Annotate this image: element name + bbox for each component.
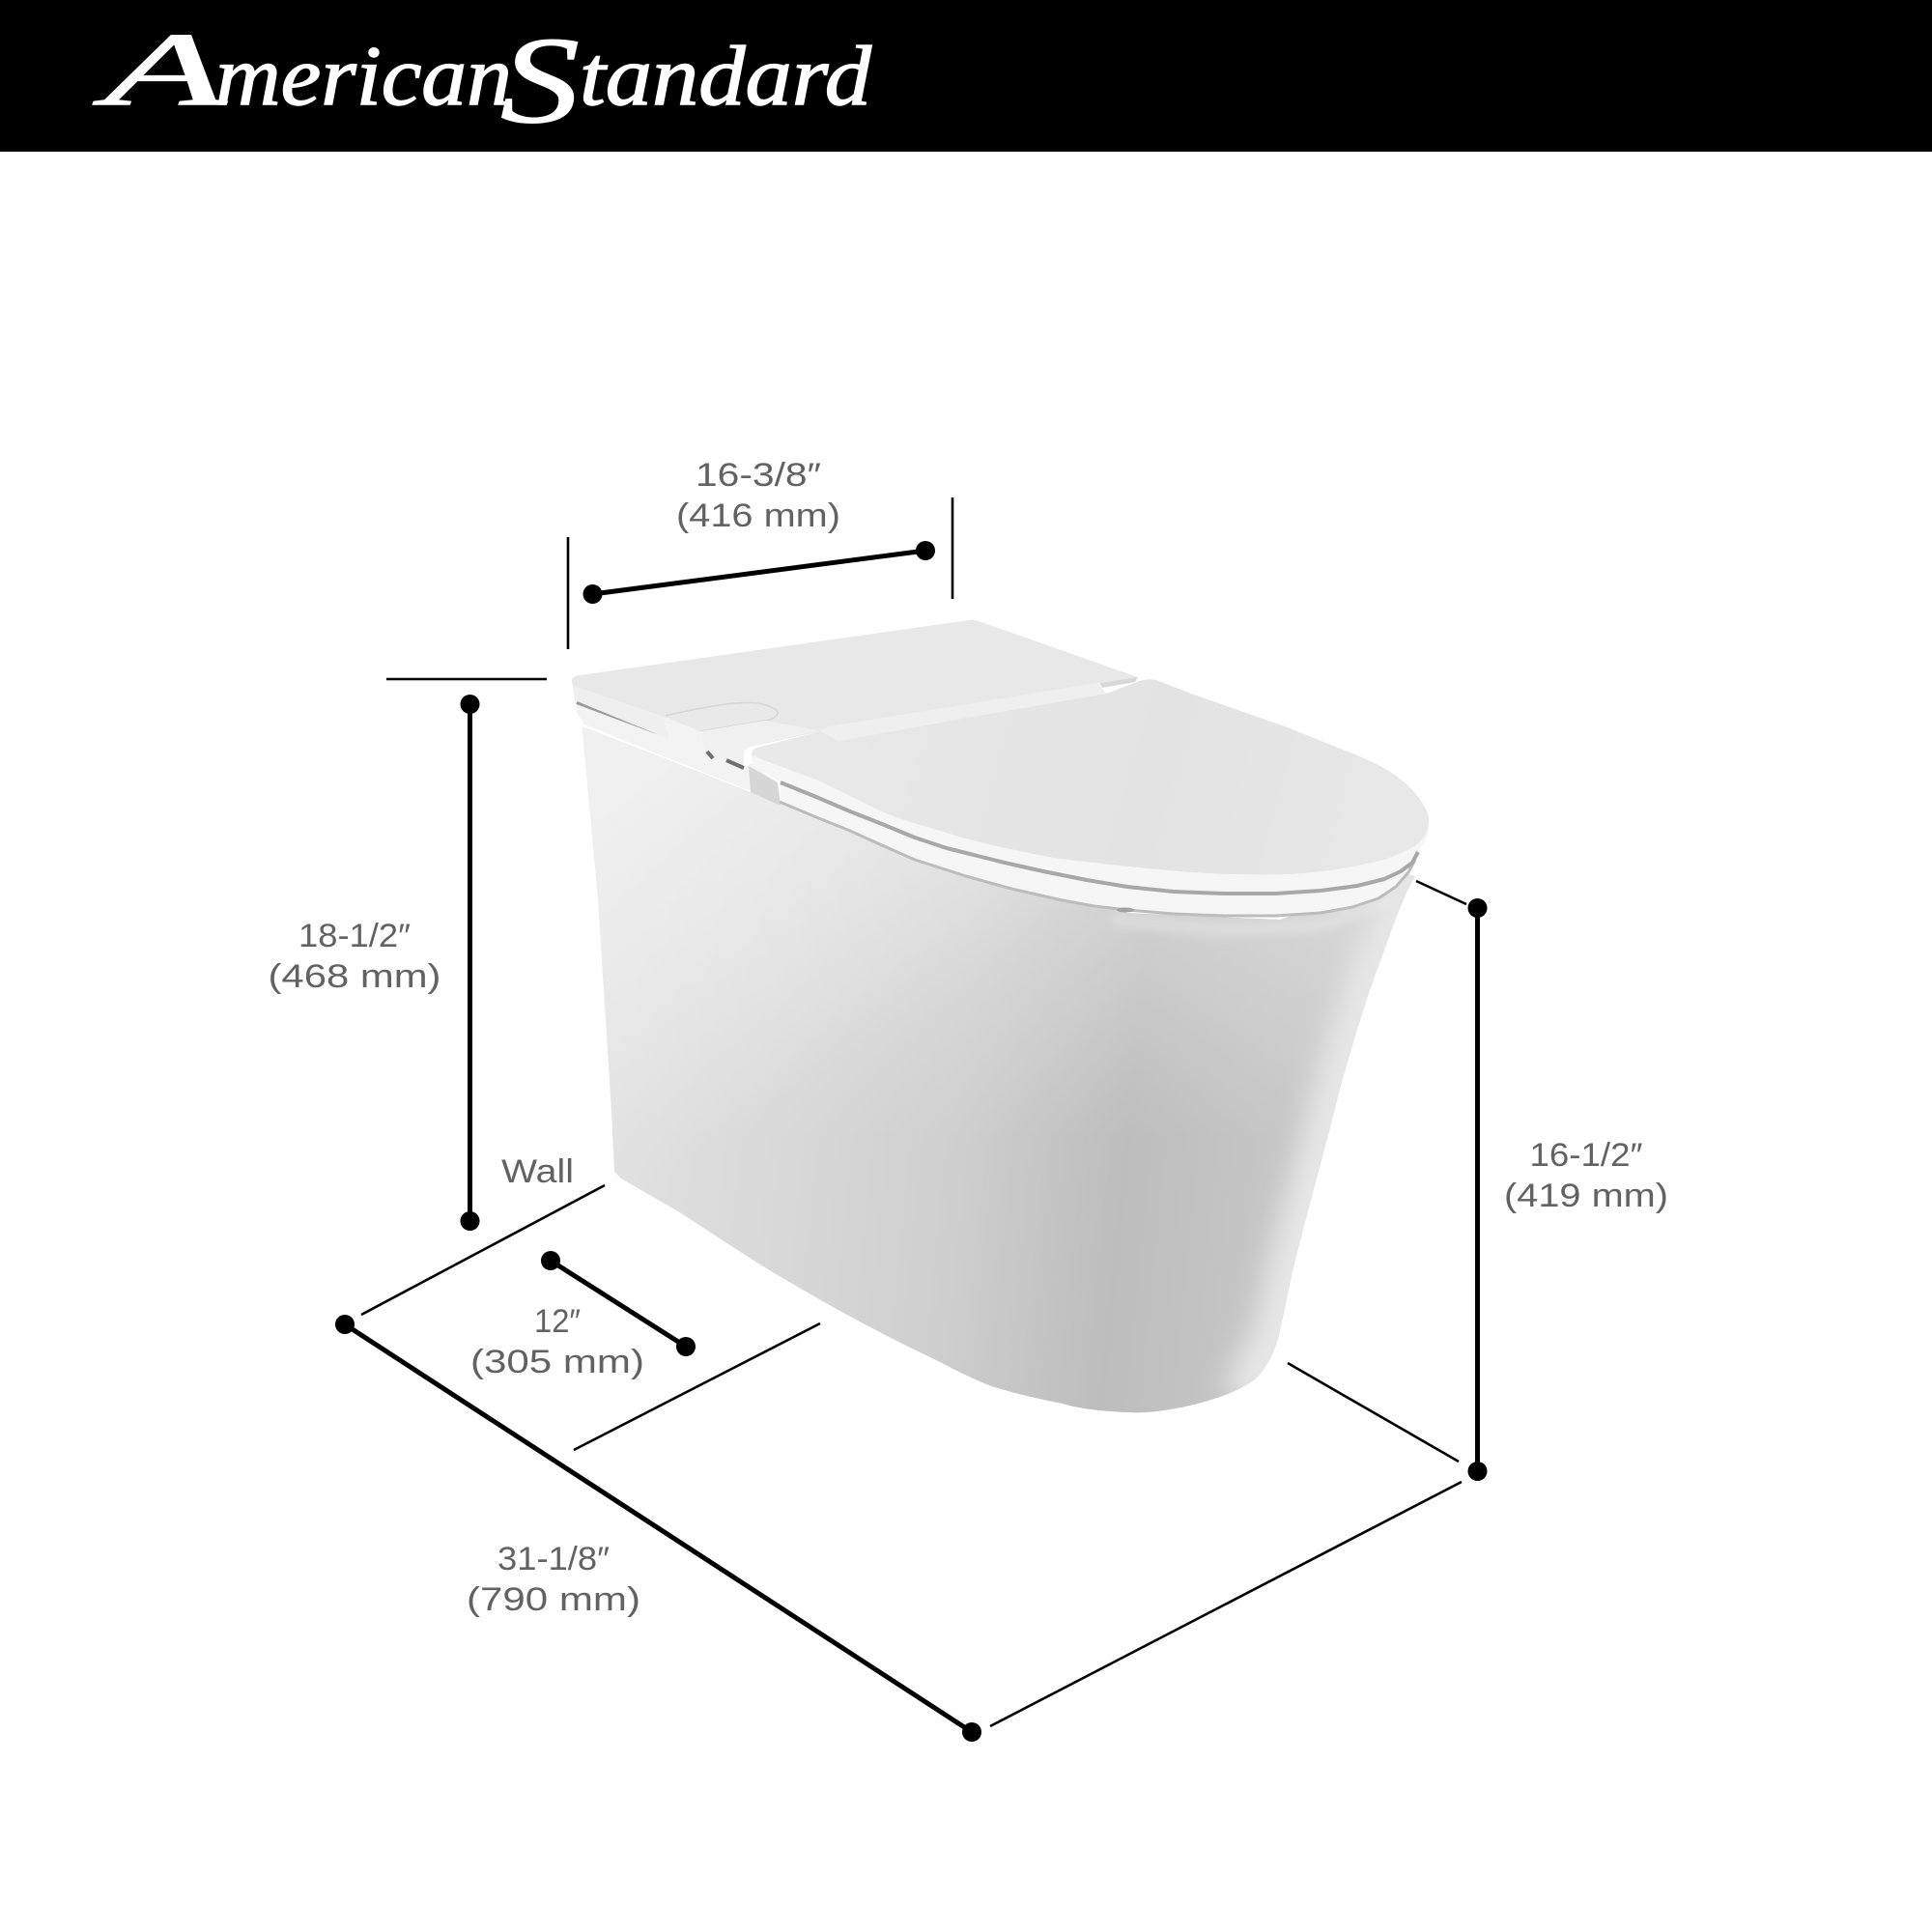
label xyxy=(467,1541,640,1618)
label: (790 mm) xyxy=(467,1581,640,1618)
dimension arrow xyxy=(335,1315,981,1742)
header band xyxy=(0,0,1932,152)
dimension: height to top 18-1/2 in xyxy=(269,679,547,1231)
hinge block xyxy=(700,721,819,768)
extension line left xyxy=(567,537,569,649)
seat rim lower grey line xyxy=(780,802,1415,916)
label: (419 mm) xyxy=(1504,1178,1668,1214)
dimension: overall length 31-1/8 in xyxy=(335,1315,981,1742)
label: 31-1/8″ xyxy=(497,1541,610,1577)
tank cover front edge xyxy=(572,681,669,739)
front extension line xyxy=(990,1482,1462,1726)
tank lower layer and hinge base xyxy=(577,702,776,791)
seat rim xyxy=(780,782,1418,916)
toilet illustration xyxy=(570,620,1430,1430)
logo: American Standard xyxy=(94,12,872,149)
label xyxy=(676,457,840,534)
dimension: seat width 16-3/8 in xyxy=(568,457,952,649)
label: 16-1/2″ xyxy=(1530,1137,1642,1174)
label: 12″ xyxy=(534,1303,581,1340)
toilet body xyxy=(570,715,1430,1430)
hinge button xyxy=(666,702,778,731)
seat rim screw mark xyxy=(1117,908,1134,912)
seat hinge bar xyxy=(821,683,1106,741)
extension line xyxy=(574,1323,820,1450)
label: (305 mm) xyxy=(470,1344,644,1380)
gap grey line under lid xyxy=(781,782,1418,894)
label: (468 mm) xyxy=(269,958,440,995)
hinge shadow xyxy=(749,766,781,806)
dimension arrow xyxy=(460,695,479,1231)
extension line right xyxy=(952,497,953,599)
label xyxy=(269,918,440,995)
extension line xyxy=(386,678,547,680)
logo: American Standard: S xyxy=(500,12,580,149)
label: 18-1/2″ xyxy=(298,918,411,954)
seat lid top xyxy=(752,679,1429,874)
dimension arrow xyxy=(541,1251,696,1356)
tank cover slit xyxy=(1099,677,1138,688)
seat lid edge xyxy=(752,752,1429,894)
label: 16-3/8″ xyxy=(696,457,821,494)
dimension arrow xyxy=(583,541,935,604)
dimension: rough-in 12 in xyxy=(470,1251,820,1450)
label xyxy=(470,1303,644,1380)
logo: American Standard: merican xyxy=(215,30,512,124)
label xyxy=(1504,1137,1668,1214)
logo: American Standard: tandard xyxy=(580,30,872,124)
dimension: seat height 16-1/2 in xyxy=(1288,881,1668,1481)
wall extension line xyxy=(361,1185,605,1315)
extension line bottom xyxy=(1288,1363,1459,1462)
label: (416 mm) xyxy=(676,497,840,534)
hinge block dark notches xyxy=(707,752,744,768)
label: Wall: Wall xyxy=(501,1153,574,1190)
tank gap line xyxy=(577,702,657,732)
logo: American Standard: A xyxy=(94,13,228,128)
dimension arrow xyxy=(1468,898,1488,1481)
extension line top xyxy=(1416,881,1466,904)
tank cover xyxy=(572,620,1138,751)
